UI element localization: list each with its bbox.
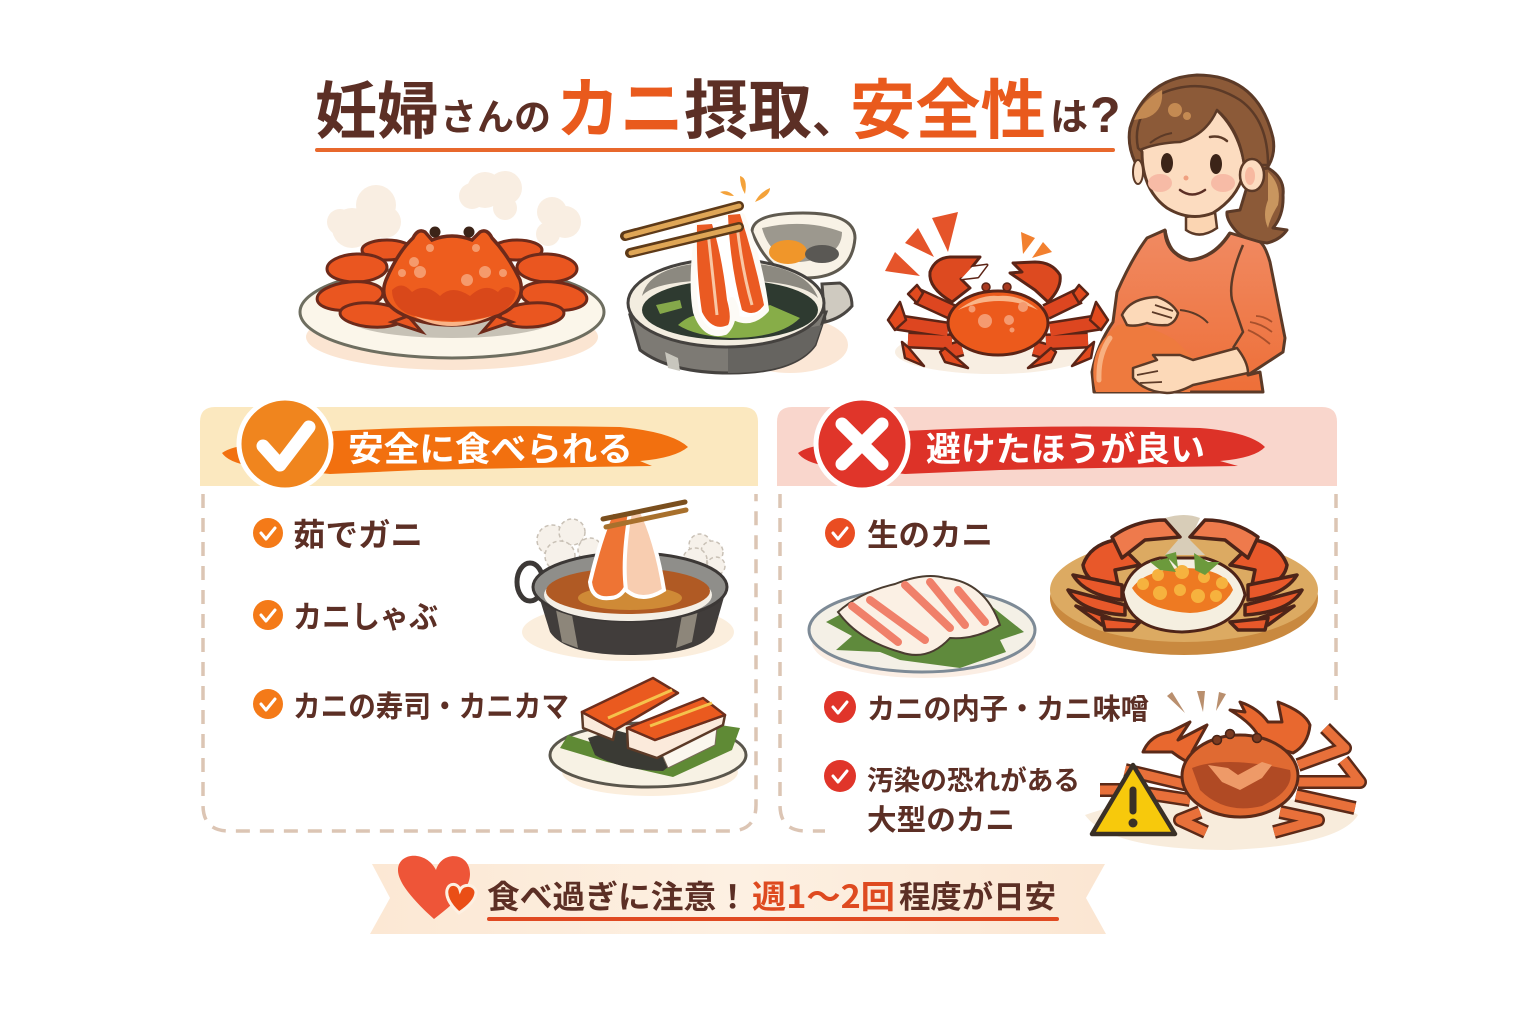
illustration: crab with alert marks <box>885 212 1108 374</box>
title <box>315 56 1121 152</box>
title: 妊婦 <box>315 61 439 151</box>
brush stroke: safe <box>222 426 688 474</box>
illustration: crab with miso on wooden plate <box>1050 515 1318 655</box>
item: crab shabu: カニしゃぶ <box>293 592 438 637</box>
panel: safe to eat <box>200 398 758 831</box>
illustration: pregnant woman <box>1092 75 1287 393</box>
panel header background: avoid <box>777 407 1337 486</box>
icon: large check <box>239 398 331 490</box>
illustration: large crab with warning <box>1085 691 1360 850</box>
title: 安全性 <box>850 58 1046 152</box>
title: ? <box>1090 87 1121 143</box>
title: カニ <box>556 56 684 152</box>
title: は <box>1050 86 1088 141</box>
item: large crab risk of contamination: 大型のカニ <box>867 797 1015 839</box>
dashed frame: safe <box>203 494 756 831</box>
icon: hearts <box>398 856 476 919</box>
title: さんの <box>440 87 551 141</box>
banner message <box>487 872 1056 918</box>
title: 、 <box>812 81 858 147</box>
title: 摂取 <box>684 60 812 152</box>
title underline <box>315 148 1115 152</box>
ribbon <box>370 864 1106 934</box>
item: large crab risk of contamination: 汚染の恐れがある <box>867 759 1080 798</box>
item: crab roe and miso: カニの内子・カニ味噌 <box>867 686 1149 728</box>
heading: safe: 安全に食べられる <box>348 422 633 471</box>
illustration: steamed crab on plate <box>300 171 604 370</box>
item: large crab risk of contamination <box>824 759 1080 839</box>
item: crab sushi and kanikama: カニの寿司・カニカマ <box>293 682 569 726</box>
panel: better to avoid <box>777 398 1360 850</box>
item: boiled crab: 茹でガニ <box>293 510 423 556</box>
illustration: crab sushi <box>550 678 746 796</box>
banner: eat in moderation <box>370 856 1106 934</box>
item: raw crab: 生のカニ <box>867 510 993 555</box>
banner message: 食べ過ぎに注意！ <box>487 872 749 918</box>
illustration: crab legs in pot <box>517 502 734 661</box>
brush stroke: avoid <box>798 427 1265 474</box>
panel header background: safe <box>200 407 758 486</box>
icon: large cross <box>816 398 908 490</box>
illustration: raw crab sashimi <box>809 576 1036 678</box>
illustration: crab leg in hot pot with chopsticks <box>625 176 855 373</box>
heading: avoid: 避けたほうが良い <box>926 422 1205 471</box>
banner underline <box>487 917 1059 921</box>
banner message: 週1～2回 <box>752 872 895 918</box>
dashed frame: avoid <box>780 494 1336 831</box>
banner message: 程度が日安 <box>899 872 1056 917</box>
